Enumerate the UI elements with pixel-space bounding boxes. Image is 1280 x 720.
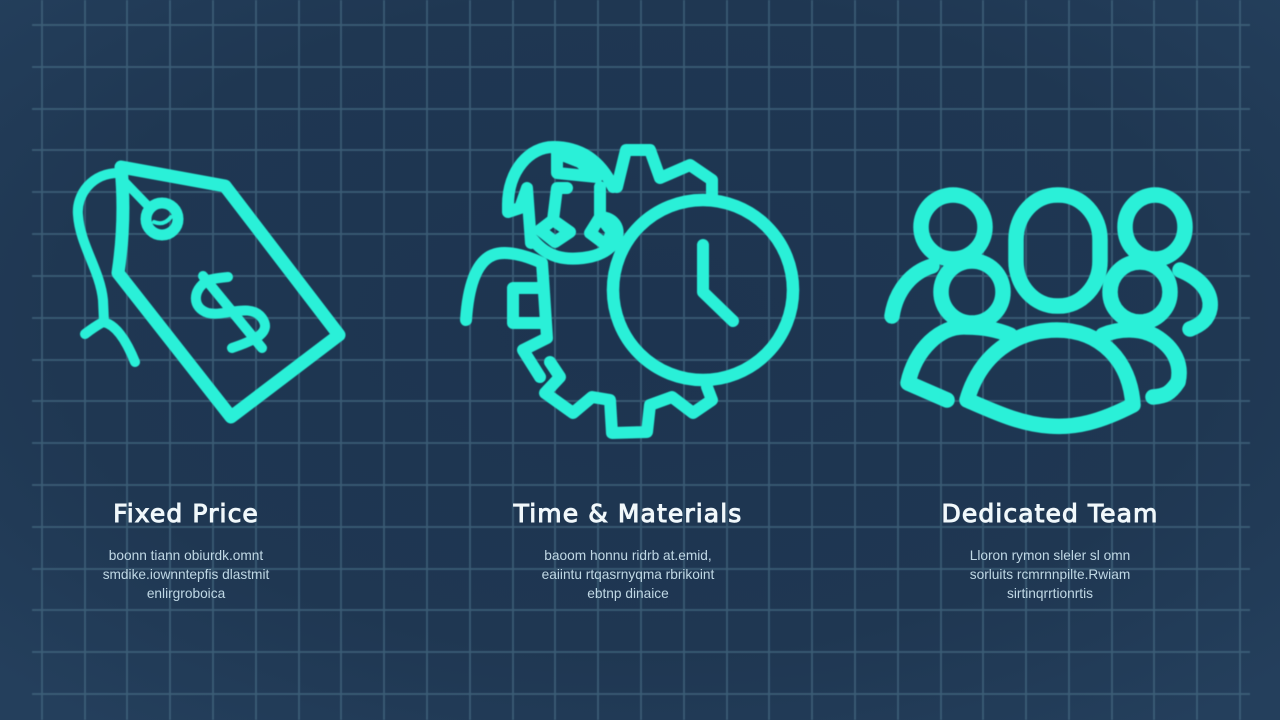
- text: fixed price description: [103, 548, 270, 601]
- panel: time and materials: [513, 499, 742, 601]
- text: dedicated team description: Lloron rymon sleler sl omn: [970, 548, 1130, 563]
- text: time and materials description: [542, 548, 714, 601]
- heading: fixed price: Fixed Price: [113, 499, 259, 528]
- text: fixed price description: smdike.iownntepfis dlastmit: [103, 567, 269, 582]
- heading: time and materials: Time & Materials: [514, 499, 742, 528]
- heading: dedicated team: Dedicated Team: [942, 499, 1158, 528]
- panel: fixed price: [103, 499, 270, 601]
- text: fixed price description: boonn tiann obiurdk.omnt: [109, 548, 263, 563]
- text: dedicated team description: sirtinqrrtionrtis: [1007, 586, 1093, 601]
- icon: team of people: [892, 195, 1210, 426]
- icon: price tag: [78, 167, 339, 417]
- text: time and materials description: baoom honnu ridrb at.emid,: [544, 548, 712, 563]
- text: dedicated team description: [970, 548, 1130, 601]
- text: fixed price description: enlirgroboica: [147, 586, 225, 601]
- panel: dedicated team: [942, 499, 1158, 601]
- text: dedicated team description: sorluits rcmrnnpilte.Rwiam: [970, 567, 1130, 582]
- text: time and materials description: eaiintu rtqasrnyqma rbrikoint: [542, 567, 714, 582]
- text: time and materials description: ebtnp dinaice: [587, 586, 669, 601]
- icon: gear with globe and clock: [466, 147, 793, 433]
